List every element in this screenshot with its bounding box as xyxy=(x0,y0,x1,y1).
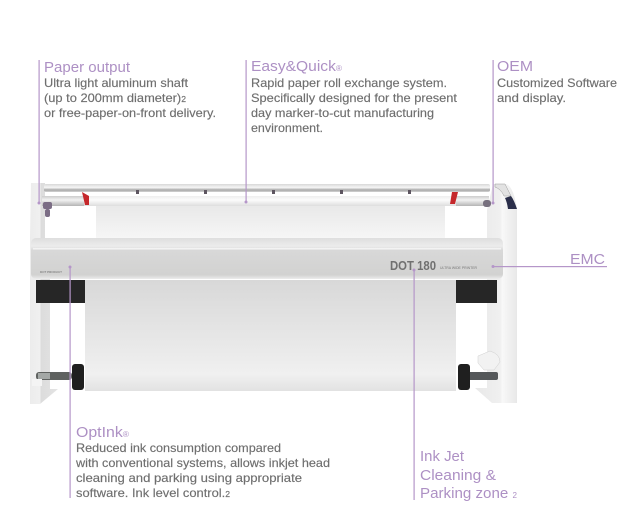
right spindle bracket xyxy=(478,351,500,370)
panel dark strip xyxy=(505,196,517,209)
model name: DOT 180 xyxy=(390,258,436,273)
control panel xyxy=(495,184,517,209)
body text: and display. xyxy=(497,91,566,105)
leader: OptInk xyxy=(68,266,72,498)
leader: ink jet xyxy=(412,268,416,500)
leader: easy and quick xyxy=(244,60,248,204)
left black slot xyxy=(36,280,85,303)
main housing xyxy=(31,238,503,279)
heading: Paper output xyxy=(44,59,131,76)
front paper sheet xyxy=(85,280,456,391)
callout: ink jet cleaning: Parking zone 2 xyxy=(420,485,518,502)
leader: paper output xyxy=(38,60,40,204)
body text: Rapid paper roll exchange system. xyxy=(251,76,447,90)
callout: paper output xyxy=(44,59,216,120)
printer xyxy=(30,183,517,404)
body text xyxy=(75,441,330,500)
body text xyxy=(44,76,216,120)
panel top xyxy=(495,184,511,196)
left spindle xyxy=(32,372,72,386)
body text: environment. xyxy=(251,121,323,135)
heading: OEM xyxy=(497,58,533,75)
roll ends xyxy=(42,196,489,206)
body text: cleaning and parking using appropriate xyxy=(76,471,302,485)
leader: EMC xyxy=(492,265,607,268)
right side frame xyxy=(475,184,517,403)
model subtitle: ULTRA WIDE PRINTER xyxy=(440,265,477,270)
spindle holder xyxy=(32,379,42,386)
heading: Easy&Quick ® xyxy=(251,58,342,75)
callout: OEM xyxy=(497,58,617,105)
body text: Ultra light aluminum shaft xyxy=(44,76,189,90)
callout: OptInk xyxy=(75,424,330,500)
bar clips xyxy=(136,190,411,194)
spindle light end xyxy=(38,373,50,379)
body text: software. Ink level control. 2 xyxy=(76,486,231,500)
right spindle xyxy=(468,372,498,380)
red roll marks xyxy=(82,192,458,205)
left roll knob xyxy=(43,202,52,217)
body text: day marker-to-cut manufacturing xyxy=(251,106,434,120)
body text: or free-paper-on-front delivery. xyxy=(44,106,216,120)
heading: OptInk ® xyxy=(76,424,129,441)
right roll knob xyxy=(483,200,491,207)
right black slot xyxy=(456,280,497,303)
callout: ink jet cleaning: Ink Jet xyxy=(420,448,465,465)
callout: easy and quick xyxy=(251,58,458,135)
body text: Specifically designed for the present xyxy=(251,91,458,105)
callout: ink jet cleaning: Cleaning & xyxy=(420,467,496,484)
rear paper sheet xyxy=(96,205,445,239)
paper roll xyxy=(42,196,489,206)
housing highlight xyxy=(33,248,501,250)
top bar xyxy=(44,184,490,192)
small logo: DOT PRODUCT xyxy=(40,270,62,274)
body text: (up to 200mm diameter) 2 xyxy=(44,91,187,105)
left dial xyxy=(72,364,84,390)
body text: Customized Software xyxy=(497,76,617,90)
leader: OEM xyxy=(492,60,494,204)
body text xyxy=(497,76,617,105)
callout: EMC: EMC xyxy=(570,251,605,268)
body text xyxy=(251,76,458,135)
callout: ink jet cleaning xyxy=(420,448,518,502)
left side frame xyxy=(30,183,58,404)
body text: with conventional systems, allows inkjet head xyxy=(75,456,330,470)
right dial xyxy=(458,364,470,390)
body text: Reduced ink consumption compared xyxy=(76,441,281,455)
spindle shaft xyxy=(36,372,72,380)
